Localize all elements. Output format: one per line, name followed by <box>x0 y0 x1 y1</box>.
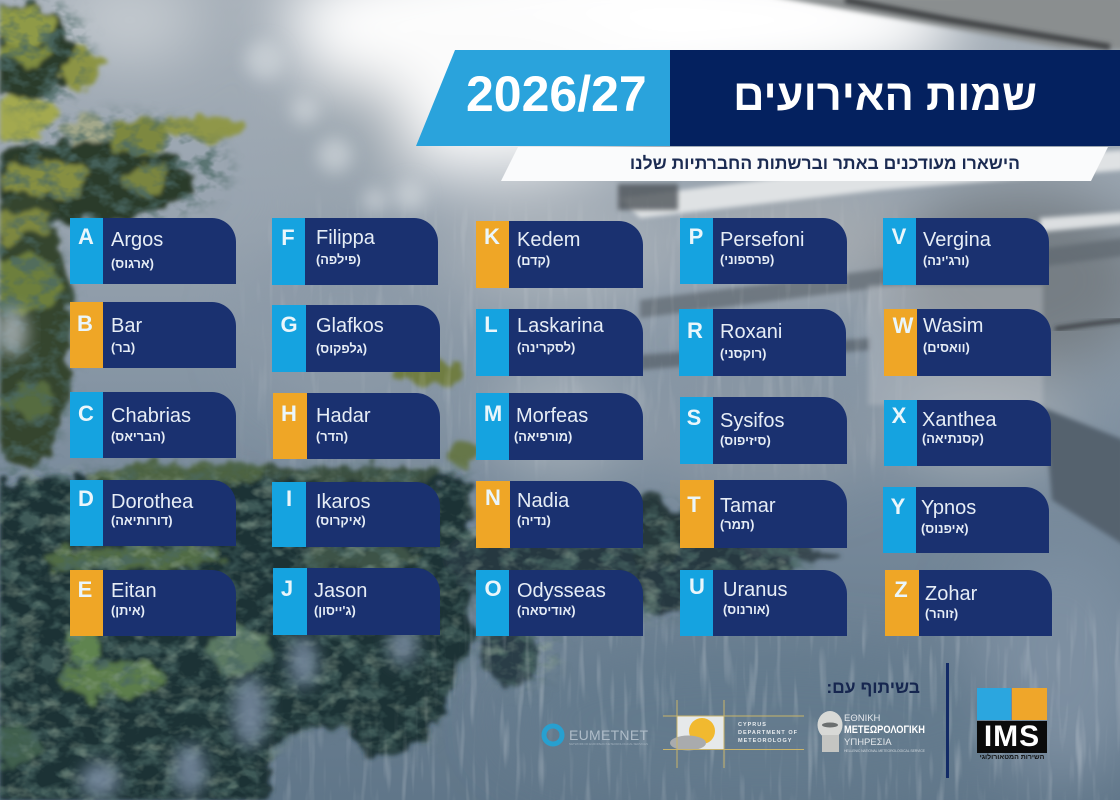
logo: EUMETNET: NETWORK OF EUROPEAN METEOROLOGICAL SERVICES <box>569 742 648 746</box>
card I: I <box>286 486 292 511</box>
upper-left tree <box>0 0 472 470</box>
card V <box>883 218 1049 285</box>
card L: Laskarina <box>517 315 604 337</box>
card W: (וואסים) <box>923 340 970 355</box>
card B <box>70 302 236 368</box>
card U: Uranus <box>723 579 787 601</box>
card N: N <box>485 485 501 510</box>
logo: Cyprus Department of Meteorology <box>663 700 804 768</box>
card A: Argos <box>111 229 163 251</box>
card K: K <box>484 224 500 249</box>
card E <box>70 570 236 636</box>
card S: S <box>687 405 701 430</box>
card S: Sysifos <box>720 410 784 432</box>
logo: Cyprus Department of Meteorology: DEPARTMENT OF <box>738 730 798 736</box>
card A: (ארגוס) <box>111 256 154 271</box>
card J: (ג'ייסון) <box>314 603 356 618</box>
card Y: (איפנוס) <box>921 521 969 536</box>
card Z: Z <box>894 577 908 602</box>
card K: Kedem <box>517 229 580 251</box>
card F: (פילפה) <box>316 252 361 267</box>
card W: W <box>893 313 913 338</box>
card I: Ikaros <box>316 491 370 513</box>
rain streaks <box>270 234 1120 800</box>
card W <box>884 309 1051 376</box>
logo: Hellenic National Meteorological Service: ΥΠΗΡΕΣΙΑ <box>844 737 892 748</box>
card M: Morfeas <box>516 405 588 427</box>
card A <box>70 218 236 284</box>
logo: EUMETNET: EUMETNET <box>569 727 648 743</box>
logo: Cyprus Department of Meteorology: METEOROLOGY <box>738 738 792 744</box>
card I: (איקרוס) <box>316 513 366 528</box>
card E: Eitan <box>111 580 157 602</box>
card K: (קדם) <box>517 253 550 268</box>
card W: Wasim <box>923 315 983 337</box>
card L <box>476 309 643 376</box>
card H: (הדר) <box>316 429 348 444</box>
card K <box>476 221 643 288</box>
card P: P <box>689 224 703 249</box>
card S: (סיזיפוס) <box>720 433 771 448</box>
card J: J <box>281 576 293 601</box>
card F: Filippa <box>316 227 375 249</box>
card T: (תמר) <box>720 517 754 532</box>
card F: F <box>281 225 295 250</box>
card X: (קסנתיאה) <box>922 431 984 446</box>
divider line <box>946 663 949 778</box>
card I <box>272 482 440 547</box>
card R: R <box>687 318 703 343</box>
card A: A <box>78 224 94 249</box>
card O: Odysseas <box>517 580 606 602</box>
logo: Hellenic National Meteorological Service: HELLENIC NATIONAL METEOROLOGICAL SERVICE <box>844 749 926 753</box>
card D: D <box>78 486 94 511</box>
card Z <box>885 570 1052 636</box>
card O: O <box>484 576 502 601</box>
subtitle text: הישארו מעודכנים באתר וברשתות החברתיות שלנו <box>630 153 1020 173</box>
card H <box>273 393 440 459</box>
card G: (גלפקוס) <box>316 341 367 356</box>
card G: Glafkos <box>316 315 384 337</box>
heading: year: 2026/27 <box>466 66 647 122</box>
partnership label: בשיתוף עם: <box>826 677 920 697</box>
card P <box>680 218 847 284</box>
card P: (פרספוני) <box>720 252 774 267</box>
card Y: Y <box>891 494 905 519</box>
card C: C <box>78 401 94 426</box>
header: blue year banner <box>416 50 670 146</box>
card J <box>273 568 440 635</box>
card G <box>272 305 440 372</box>
card E: E <box>78 577 92 602</box>
out-of-focus raindrops <box>80 625 417 798</box>
card T: Tamar <box>720 495 776 517</box>
card R: (רוקסני) <box>720 346 766 361</box>
card B: B <box>77 311 93 336</box>
card P: Persefoni <box>720 229 804 251</box>
card V: Vergina <box>923 229 991 251</box>
card U: (אורנוס) <box>723 602 770 617</box>
card U <box>680 570 847 636</box>
card T <box>680 480 847 548</box>
logo: Cyprus Department of Meteorology: CYPRUS <box>738 722 767 728</box>
logo: EUMETNET <box>542 724 648 746</box>
card C <box>70 392 236 458</box>
card B: Bar <box>111 315 142 337</box>
card D: Dorothea <box>111 491 193 513</box>
card Y: Ypnos <box>921 497 976 519</box>
logo: Hellenic National Meteorological Service: ΕΘΝΙΚΗ <box>844 713 881 724</box>
card X: X <box>892 403 906 428</box>
lower forest <box>0 462 840 800</box>
logo: IMS: IMS <box>984 720 1040 753</box>
card X: Xanthea <box>922 409 997 431</box>
card U: U <box>689 574 705 599</box>
logo: Hellenic National Meteorological Service <box>818 711 926 753</box>
card X <box>884 400 1051 466</box>
card D: (דורותיאה) <box>111 513 172 528</box>
card C: (הבריאס) <box>111 429 165 444</box>
card T: T <box>687 492 701 517</box>
card Y <box>883 487 1049 553</box>
card Z: (זוהר) <box>925 606 958 621</box>
card M: (מורפיאה) <box>514 429 572 444</box>
card H: Hadar <box>316 405 370 427</box>
card M <box>476 393 643 460</box>
header: navy title banner <box>670 50 1120 146</box>
fog blobs <box>36 40 426 212</box>
card N: Nadia <box>517 490 569 512</box>
card Z: Zohar <box>925 583 977 605</box>
card F <box>272 218 438 285</box>
card H: H <box>281 401 297 426</box>
building roof and eaves <box>618 0 1120 545</box>
heading: title: שמות האירועים <box>733 72 1037 120</box>
card V: V <box>892 224 906 249</box>
card M: M <box>484 401 502 426</box>
card R <box>679 309 846 376</box>
card R: Roxani <box>720 321 782 343</box>
card L: L <box>484 312 498 337</box>
card J: Jason <box>314 580 367 602</box>
card S <box>680 397 847 464</box>
card E: (איתן) <box>111 603 145 618</box>
card O: (אודיסאה) <box>517 603 575 618</box>
subtitle strip <box>501 147 1108 181</box>
card L: (לסקרינה) <box>517 340 575 355</box>
card B: (בר) <box>111 340 135 355</box>
card N: (נדיה) <box>517 513 551 528</box>
card N <box>476 481 643 548</box>
card V: (ורג'ינה) <box>923 253 969 268</box>
card C: Chabrias <box>111 405 191 427</box>
logo: IMS <box>977 688 1047 761</box>
card D <box>70 480 236 546</box>
logo: IMS: השירות המטאורולוגי <box>980 754 1044 761</box>
card O <box>476 570 643 636</box>
card G: G <box>280 312 298 337</box>
